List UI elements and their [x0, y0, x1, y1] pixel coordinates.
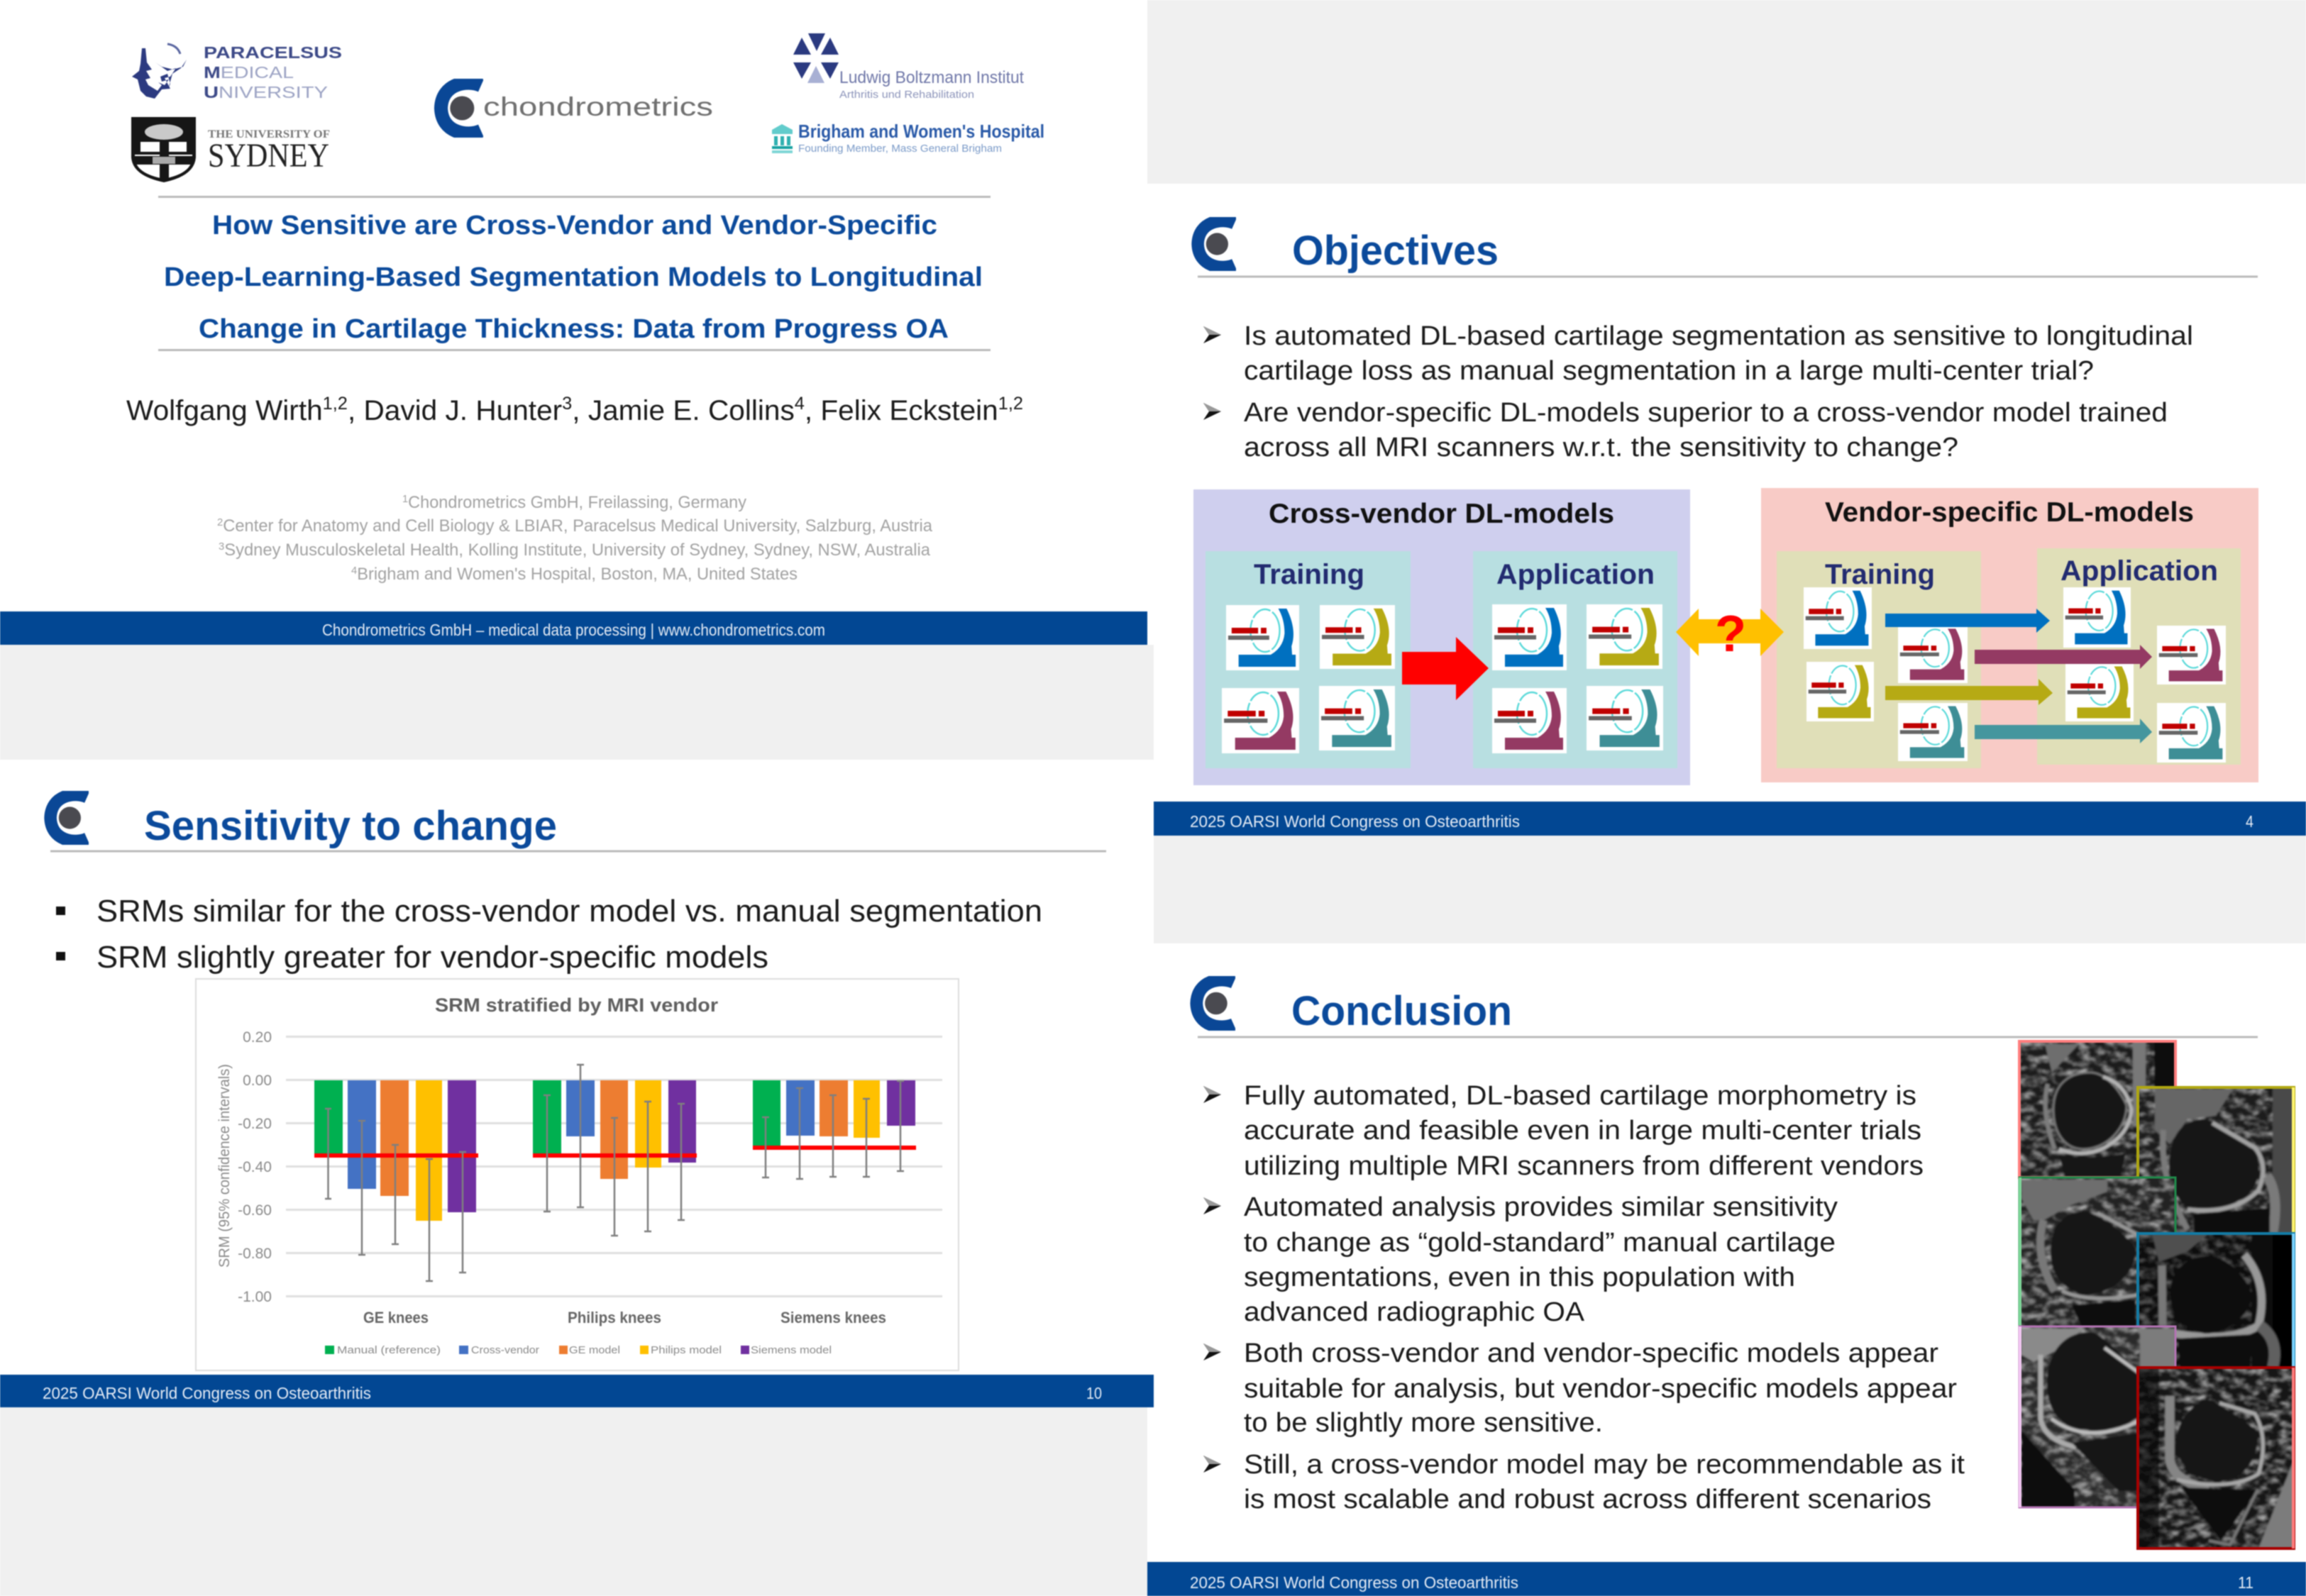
affiliations: 1: [402, 493, 408, 505]
footer bar: 2025 OARSI World Congress on Osteoarthritis: [43, 1384, 371, 1402]
affiliations: 2: [217, 516, 223, 528]
text block: conclusions: Fully automated, DL-based cartilage morphometry is: [1244, 1081, 1916, 1111]
category labels: Philips knees: [568, 1309, 661, 1326]
text block: conclusions: Automated analysis provides similar sensitivity: [1244, 1192, 1838, 1222]
training group: Training: [1825, 559, 1935, 590]
legend: Siemens model: [751, 1344, 832, 1356]
legend: Manual (reference): [337, 1344, 441, 1356]
logo: Ludwig Boltzmann Institut: Ludwig Boltzmann Institut: [839, 68, 1024, 87]
authors: , Jamie E. Collins: [572, 395, 795, 426]
logo: Paracelsus Medical University: UNIVERSITY: [204, 83, 328, 101]
y axis labels: 0.20: [243, 1029, 272, 1046]
logo: The University of Sydney: [131, 117, 330, 182]
bar chart: SRM stratified by MRI vendor: [196, 979, 959, 1370]
reference lines: manual segmentation: [314, 1146, 916, 1158]
text block: research questions: Are vendor-specific DL-models superior to a cross-vendor model trained: [1244, 398, 2168, 428]
heading: objectives: [1198, 221, 2258, 278]
text block: key findings: SRM slightly greater for vendor-specific models: [96, 940, 768, 975]
arrow: teal vendor: [1975, 719, 2152, 743]
training group: Training: [1254, 559, 1364, 590]
authors: 1,2: [323, 394, 348, 414]
scanner icons: [1804, 587, 2226, 763]
panel: vendor-specific DL-models: [1761, 488, 2258, 782]
text block: key findings: [56, 894, 1042, 975]
category labels: [363, 1309, 886, 1326]
legend: GE model: [569, 1344, 620, 1356]
heading: sensitivity to change: [50, 795, 1106, 853]
footer bar: [0, 1375, 1154, 1407]
legend: [325, 1344, 832, 1356]
footer bar: [1147, 1562, 2306, 1596]
logo: Ludwig Boltzmann Institut: [793, 33, 1024, 101]
footer bar: 2025 OARSI World Congress on Osteoarthritis: [1190, 1573, 1518, 1592]
affiliations: 3: [219, 541, 224, 553]
y axis labels: -0.80: [238, 1246, 272, 1262]
application group: [1473, 551, 1677, 768]
text block: conclusions: advanced radiographic OA: [1244, 1297, 1585, 1327]
text block: research questions: Is automated DL-based cartilage segmentation as sensitive to longitudinal: [1244, 321, 2193, 351]
text block: conclusions: utilizing multiple MRI scanners from different vendors: [1244, 1151, 1924, 1181]
MRI scan: green frame: [2015, 1173, 2180, 1331]
y axis title: SRM (95% confidence intervals): [216, 1064, 233, 1268]
affiliations: Center for Anatomy and Cell Biology & LBIAR, Paracelsus Medical University, Salzburg, Austria: [223, 516, 933, 536]
text block: key findings: SRMs similar for the cross-vendor model vs. manual segmentation: [96, 894, 1042, 929]
logo: Paracelsus Medical University: MEDICAL: [204, 63, 294, 82]
MRI scan: purple frame: [2015, 1322, 2180, 1512]
y axis labels: -1.00: [238, 1289, 272, 1305]
y axis labels: -0.60: [238, 1202, 272, 1219]
logo: The University of Sydney: SYDNEY: [208, 137, 329, 174]
panel: vendor-specific DL-models: Vendor-specific DL-models: [1825, 497, 2194, 528]
MRI scan: blue frame: [2134, 1229, 2298, 1372]
logo: Ludwig Boltzmann Institut: Arthritis und Rehabilitation: [839, 89, 974, 101]
title: [164, 211, 983, 344]
text block: conclusions: [1203, 1081, 1965, 1514]
title: Deep-Learning-Based Segmentation Models to Longitudinal: [164, 262, 983, 292]
chart title: SRM stratified by MRI vendor: [435, 994, 719, 1016]
legend: Philips model: [651, 1344, 722, 1356]
text block: conclusions: Both cross-vendor and vendor-specific models appear: [1244, 1339, 1938, 1368]
heading: objectives: Objectives: [1292, 228, 1499, 274]
panel: conclusion slide: [1147, 980, 2306, 1596]
application group: Application: [1496, 559, 1655, 590]
logo: Brigham and Women's Hospital: Founding Member, Mass General Brigham: [798, 143, 1002, 155]
error bars: 95% confidence intervals: [325, 1065, 904, 1281]
footer bar: Chondrometrics GmbH – medical data processing | www.chondrometrics.com: [322, 621, 825, 639]
panel: sensitivity to change slide: [0, 795, 1154, 1407]
footer bar: [1154, 802, 2306, 836]
authors: , David J. Hunter: [348, 395, 562, 426]
bars: Siemens knees: [753, 1080, 915, 1147]
authors: Wolfgang Wirth: [126, 395, 320, 426]
y axis labels: -0.20: [238, 1116, 272, 1132]
legend: Cross-vendor: [471, 1344, 539, 1356]
text block: conclusions: suitable for analysis, but vendor-specific models appear: [1244, 1374, 1957, 1404]
arrow: comparison double arrow with question mark: [1676, 606, 1784, 663]
text block: research questions: [1203, 321, 2193, 462]
category labels: GE knees: [363, 1309, 429, 1326]
logo: Paracelsus Medical University: [132, 43, 342, 101]
text block: conclusions: accurate and feasible even in large multi-center trials: [1244, 1116, 1921, 1146]
image stack: knee MRI scans: [2015, 1037, 2298, 1553]
authors: 1,2: [998, 394, 1023, 414]
authors: 4: [795, 394, 805, 414]
footer bar: 4: [2246, 812, 2253, 831]
application group: Application: [2060, 555, 2218, 587]
application group: [2037, 548, 2241, 765]
y axis labels: -0.40: [238, 1159, 272, 1175]
affiliations: 4: [351, 565, 357, 577]
title: How Sensitive are Cross-Vendor and Vendor-Specific: [212, 211, 937, 240]
bars: Philips knees: [533, 1080, 696, 1179]
training group: [1206, 551, 1411, 768]
panel: title slide: [0, 33, 1147, 645]
category labels: Siemens knees: [780, 1309, 886, 1326]
heading: conclusion: Conclusion: [1291, 988, 1512, 1034]
affiliations: [217, 493, 933, 584]
logo: Brigham and Women's Hospital: [772, 121, 1044, 155]
footer bar: [0, 611, 1147, 645]
arrow: training to application: [1402, 637, 1489, 700]
heading: conclusion: [1196, 980, 2258, 1038]
text block: conclusions: to be slightly more sensitive.: [1244, 1408, 1603, 1438]
panel: cross-vendor DL-models: Cross-vendor DL-models: [1269, 499, 1614, 529]
logo: Brigham and Women's Hospital: Brigham and Women's Hospital: [798, 121, 1044, 142]
footer bar: 11: [2238, 1573, 2253, 1592]
bars: GE knees: [314, 1080, 476, 1221]
affiliations: Chondrometrics GmbH, Freilassing, Germany: [408, 493, 746, 512]
arrow: comparison double arrow with question mark: ?: [1715, 606, 1746, 663]
arrow: olive vendor: [1885, 679, 2053, 705]
logo: The University of Sydney: THE UNIVERSITY OF: [208, 128, 330, 140]
text block: research questions: across all MRI scanners w.r.t. the sensitivity to change?: [1244, 433, 1958, 462]
text block: conclusions: Still, a cross-vendor model may be recommendable as it: [1244, 1450, 1965, 1480]
text block: conclusions: segmentations, even in this population with: [1244, 1263, 1795, 1292]
text block: research questions: cartilage loss as manual segmentation in a large multi-center trial?: [1244, 356, 2094, 386]
y axis labels: 0.00: [243, 1073, 272, 1089]
y axis labels: [238, 1029, 272, 1305]
affiliations: Sydney Musculoskeletal Health, Kolling Institute, University of Sydney, Sydney, NSW, Australia: [224, 541, 931, 560]
logo: Paracelsus Medical University: PARACELSUS: [204, 43, 342, 62]
footer bar: 2025 OARSI World Congress on Osteoarthritis: [1190, 812, 1520, 831]
affiliations: Brigham and Women's Hospital, Boston, MA, United States: [357, 565, 798, 584]
arrow: maroon vendor: [1975, 645, 2152, 669]
logo: chondrometrics: [441, 83, 713, 133]
authors: 3: [562, 394, 572, 414]
panel: cross-vendor DL-models: [1193, 489, 1690, 785]
MRI scan: dark red frame: [2134, 1363, 2298, 1553]
title: Change in Cartilage Thickness: Data from Progress OA: [199, 314, 949, 344]
MRI scan: yellow frame: [2134, 1083, 2298, 1238]
arrow: blue vendor: [1885, 609, 2050, 633]
heading: sensitivity to change: Sensitivity to change: [144, 803, 557, 849]
text block: conclusions: to change as “gold-standard” manual cartilage: [1244, 1228, 1836, 1258]
training group: [1777, 551, 1981, 768]
authors: , Felix Eckstein: [805, 395, 998, 426]
panel: objectives slide: [1154, 221, 2306, 836]
MRI scan: red frame: [2015, 1037, 2180, 1182]
logo: chondrometrics: chondrometrics: [483, 92, 713, 121]
footer bar: 10: [1086, 1384, 1102, 1402]
text block: conclusions: is most scalable and robust across different scenarios: [1244, 1485, 1931, 1514]
